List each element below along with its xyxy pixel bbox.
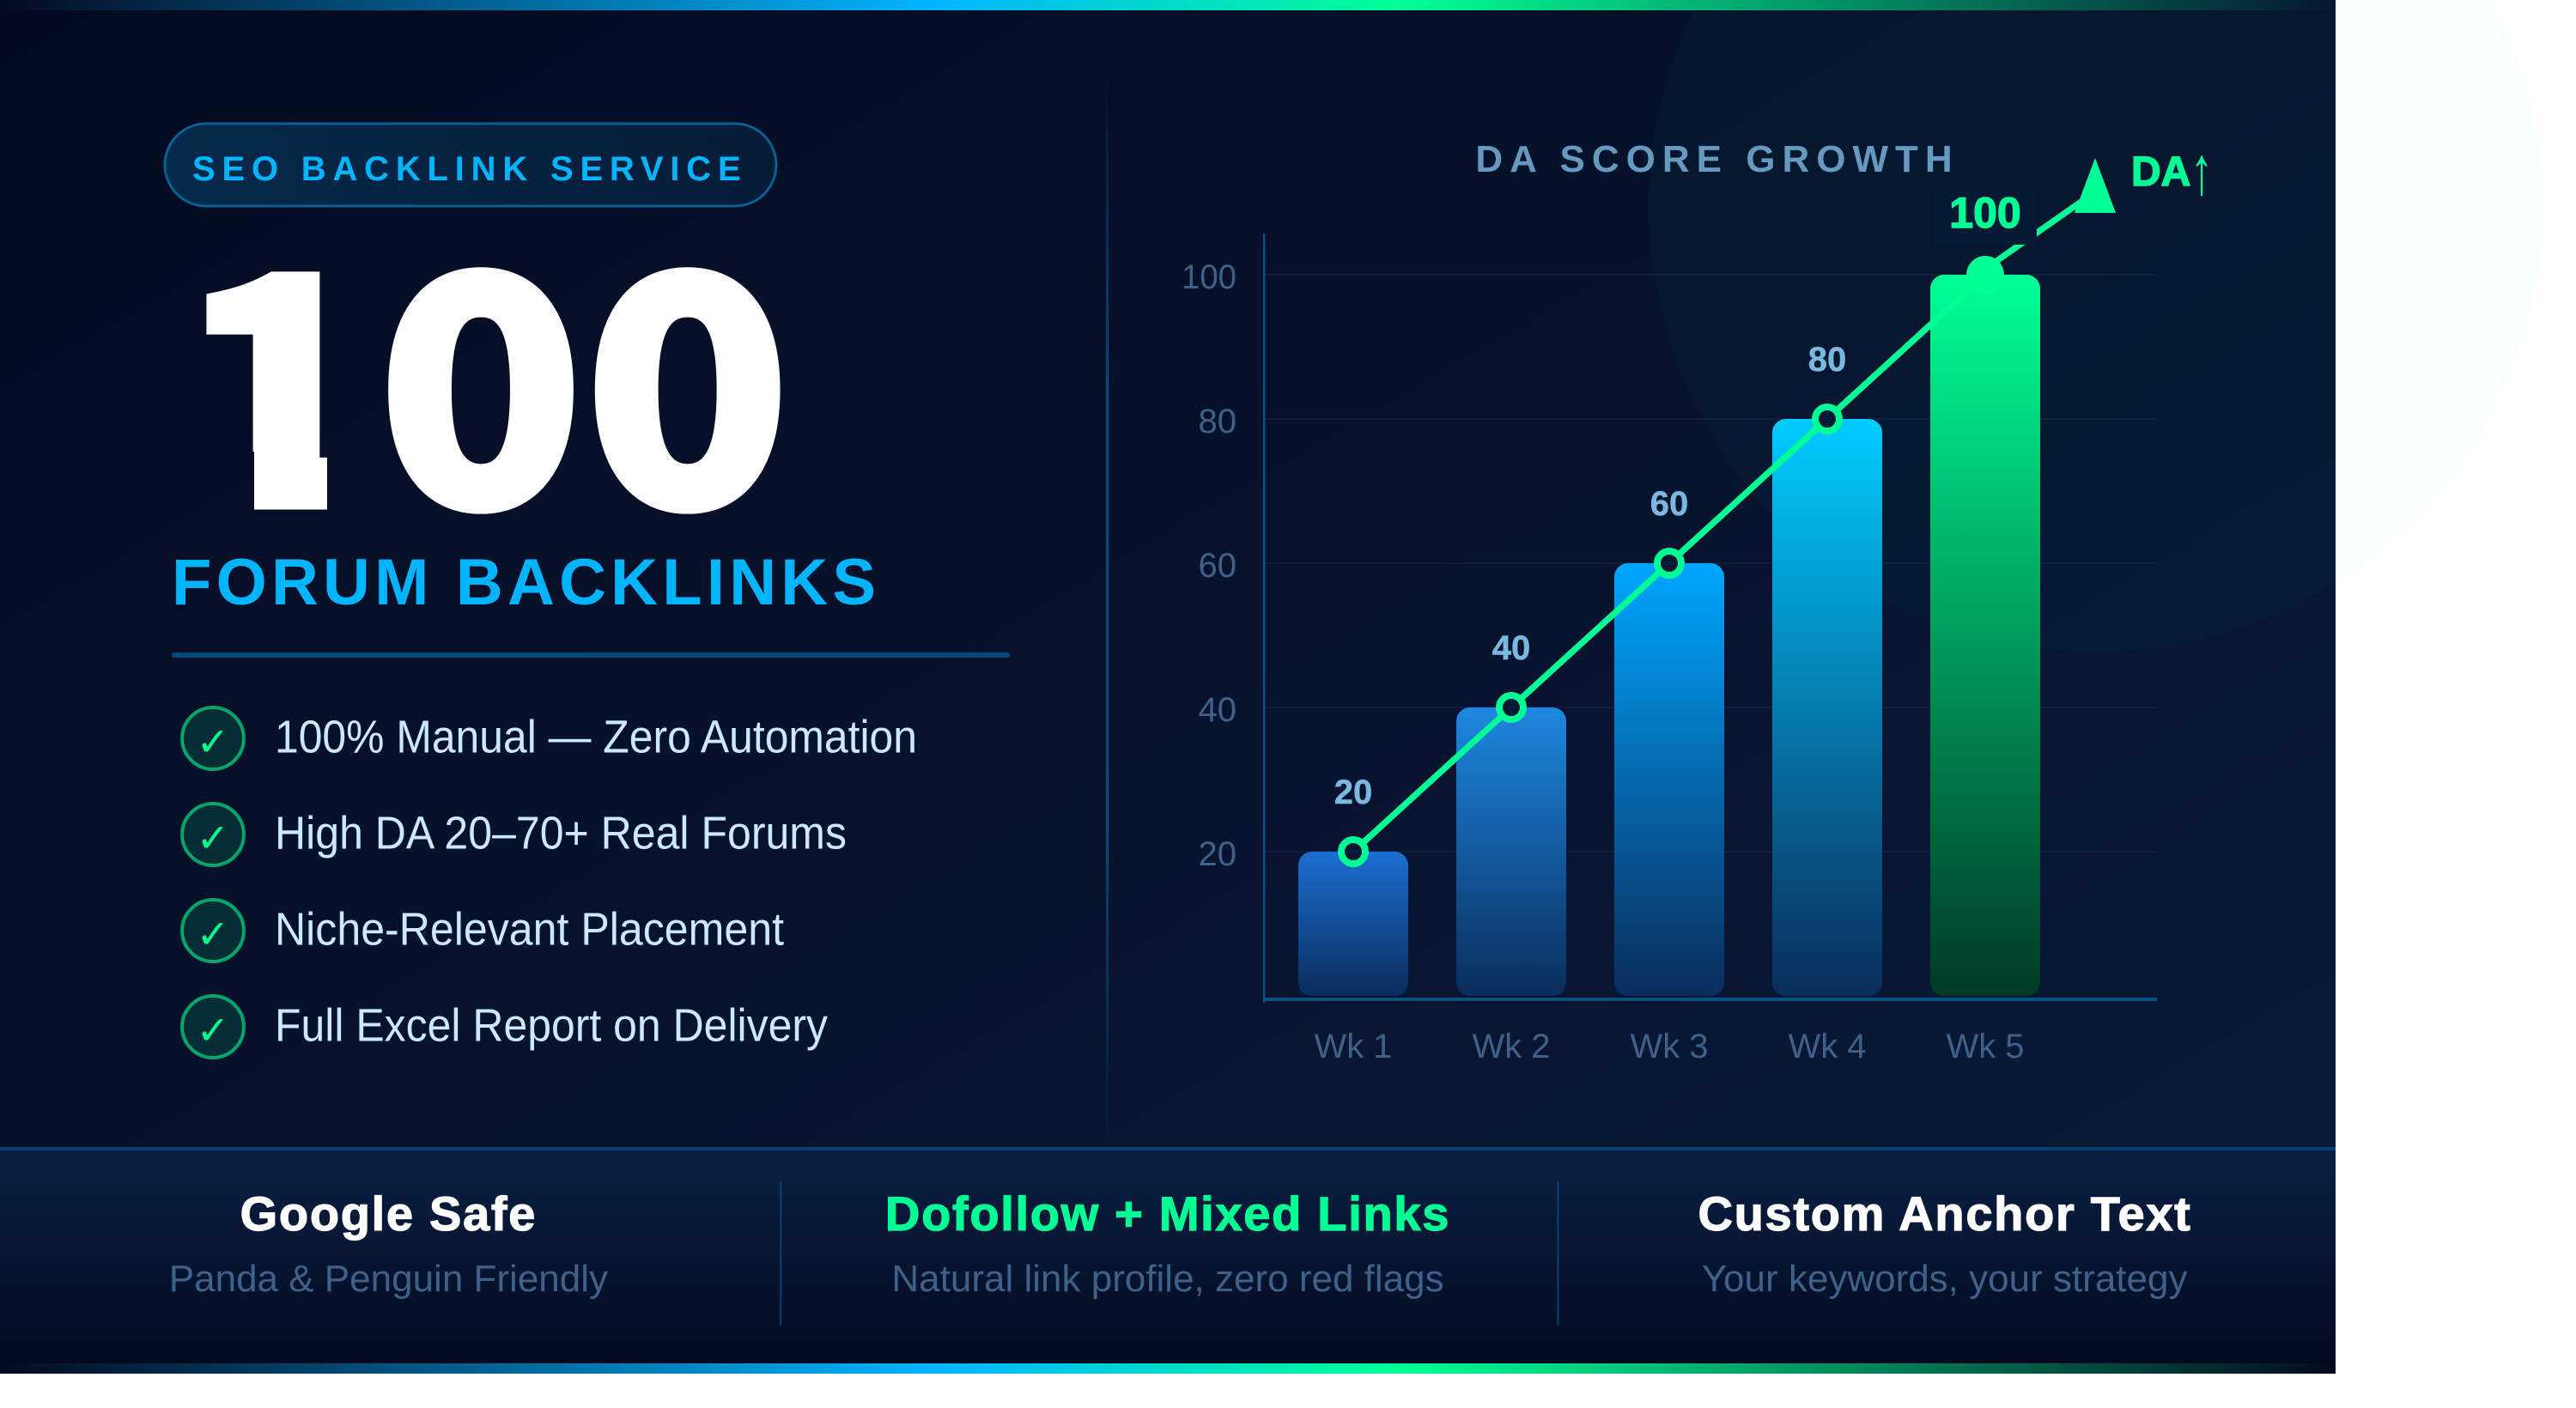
y axis labels: 20 [1199,835,1236,873]
footer item: google safe: Google Safe [240,1186,537,1241]
arrow head [2075,158,2116,213]
feature: manual: ✓ [197,719,229,764]
chart title: DA SCORE GROWTH [1475,138,1959,180]
big number: 1 [176,137,383,599]
footer item: google safe: Panda & Penguin Friendly [169,1258,608,1300]
y axis labels [1182,258,1236,873]
feature: high DA [182,804,847,865]
axes [1263,234,2157,1003]
bars [1298,275,2040,996]
footer item: custom anchor: Your keywords, your strategy [1702,1258,2187,1300]
label mask: 100 [1934,192,2037,245]
feature: niche relevant: ✓ [197,912,229,956]
big number [206,267,781,514]
feature: excel report: Full Excel Report on Delivery [275,1000,828,1052]
badge: SEO backlink service: SEO BACKLINK SERVICE [192,150,747,188]
x axis labels [1314,1028,2025,1065]
feature: excel report [182,996,828,1058]
y axis labels: 40 [1199,691,1236,729]
x axis labels: Wk 3 [1630,1028,1709,1065]
footer item: custom anchor: Custom Anchor Text [1698,1186,2192,1241]
footer item: custom anchor [1698,1186,2192,1300]
feature: niche relevant [182,900,784,962]
panel: DA score growth chart [1182,132,2213,1065]
footer item: dofollow [885,1186,1450,1300]
value labels: 60 [1650,485,1688,523]
feature: excel report: ✓ [197,1008,229,1053]
footer dividers [780,1181,1559,1326]
feature: manual: 100% Manual — Zero Automation [275,712,917,763]
growth line [1353,275,1985,852]
feature: high DA: High DA 20–70+ Real Forums [275,808,847,859]
y axis labels: 80 [1199,403,1236,440]
feature list [182,707,917,1058]
heading rule [172,652,1010,658]
heading: forum backlinks: FORUM BACKLINKS [172,546,880,619]
value labels [1334,341,1846,811]
y axis labels: 100 [1182,258,1236,296]
x axis labels: Wk 5 [1946,1028,2025,1065]
footer item: google safe [169,1186,608,1300]
grid lines [1264,275,2157,852]
x axis labels: Wk 4 [1788,1028,1867,1065]
top gradient bar [0,0,2336,10]
footer strip [0,1147,2336,1374]
y axis labels: 60 [1199,547,1236,585]
big number: 00 [378,137,791,599]
panel: left hero [165,124,1010,1058]
feature: manual [182,707,917,769]
footer item: dofollow: Dofollow + Mixed Links [885,1186,1450,1241]
x axis labels: Wk 2 [1472,1028,1551,1065]
DA up label: ↑ [2190,132,2213,209]
DA up label: DA [2131,149,2190,195]
x axis labels: Wk 1 [1314,1028,1393,1065]
value labels: 40 [1492,629,1530,667]
arrow shaft [1985,199,2085,269]
footer item: dofollow: Natural link profile, zero red flags [891,1258,1444,1300]
feature: niche relevant: Niche-Relevant Placement [275,904,784,956]
background glow circle [1649,0,2542,652]
feature: high DA: ✓ [197,816,229,860]
bottom gradient bar [0,1363,2336,1374]
growth line over bars [1353,275,1985,852]
value label: 100: 100 [1949,189,2021,237]
badge: SEO backlink service [165,124,776,206]
value labels: 20 [1334,774,1372,811]
data points [1341,259,2001,864]
value labels: 80 [1808,341,1846,379]
DA up label [2131,132,2213,209]
